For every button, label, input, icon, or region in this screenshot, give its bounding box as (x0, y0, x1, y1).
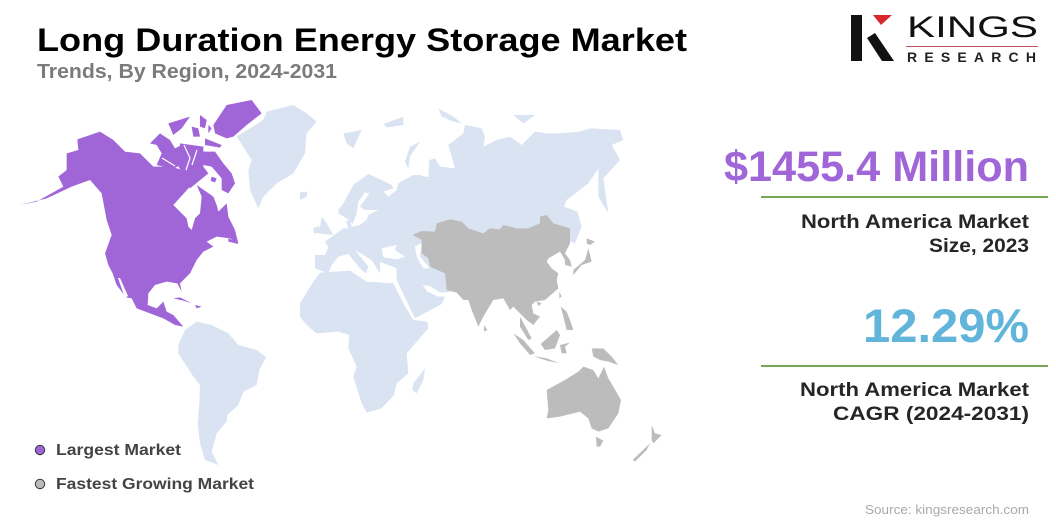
region: rest of world (178, 105, 623, 465)
subtitle: Trends, By Region, 2024-2031 (37, 61, 337, 83)
world map (20, 100, 662, 465)
stat: market size value: $1455.4 Million (724, 143, 1029, 191)
legend item: fastest growing market: Fastest Growing Market (56, 476, 254, 493)
stat: cagr value: 12.29% (863, 299, 1029, 352)
stat: cagr label (800, 380, 1030, 425)
logo: kings research: RESEARCH (907, 49, 1036, 65)
stat: market size label (801, 212, 1030, 257)
logo: kings research: KINGS (907, 11, 1038, 44)
white slit: gulf of california (118, 278, 128, 298)
legend item: largest market: Largest Market (56, 442, 181, 459)
divider: cagr (761, 365, 1048, 367)
legend (35, 442, 254, 493)
region: asia pacific (fastest growing market) (413, 215, 662, 462)
white channels between arctic islands (162, 145, 197, 170)
logo: kings research (851, 11, 1038, 65)
stat: cagr label: North America Market (800, 380, 1030, 401)
stat: market size label: North America Market (801, 212, 1030, 233)
title: Long Duration Energy Storage Market (37, 22, 687, 58)
seas cut out of the land (382, 243, 430, 268)
stat: cagr label: CAGR (2024-2031) (833, 404, 1029, 425)
divider: market size (761, 196, 1048, 198)
source note: Source: kingsresearch.com (865, 503, 1029, 517)
stat: market size label: Size, 2023 (929, 236, 1029, 257)
region: north america (largest market) (20, 100, 262, 327)
